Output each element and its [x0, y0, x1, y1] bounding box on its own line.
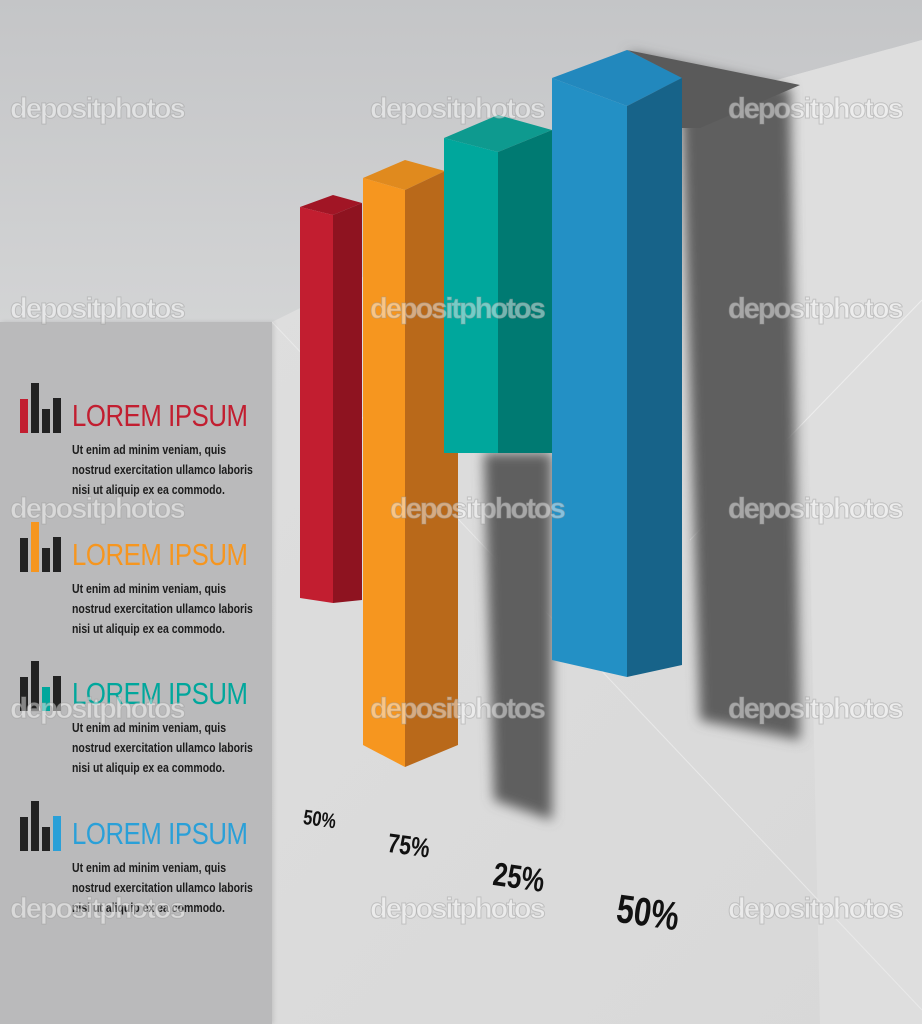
legend item: red	[20, 383, 253, 497]
watermarks: depositphotos	[728, 693, 902, 725]
legend item: teal	[20, 661, 253, 775]
bar: orange	[363, 160, 458, 767]
watermarks: depositphotos	[370, 693, 544, 725]
left panel	[0, 322, 272, 1024]
legend item: orange: Ut enim ad minim veniam, quis	[72, 582, 226, 596]
legend item: red: LOREM IPSUM	[72, 398, 248, 433]
legend item: teal: nostrud exercitation ullamco laboris	[72, 741, 253, 755]
legend item: orange: LOREM IPSUM	[72, 537, 248, 572]
watermarks: depositphotos	[10, 493, 184, 525]
watermarks: depositphotos	[728, 293, 902, 325]
watermarks: depositphotos	[728, 93, 902, 125]
legend item: orange: nisi ut aliquip ex ea commodo.	[72, 622, 225, 636]
legend item: red: Ut enim ad minim veniam, quis	[72, 443, 226, 457]
text: 25%	[491, 855, 547, 899]
legend item: teal: Ut enim ad minim veniam, quis	[72, 721, 226, 735]
watermarks: depositphotos	[10, 893, 184, 925]
watermarks: depositphotos	[728, 493, 902, 525]
legend item: blue: nostrud exercitation ullamco laboris	[72, 881, 253, 895]
text: 75%	[386, 828, 432, 864]
legend item: blue: LOREM IPSUM	[72, 816, 248, 851]
legend item: blue: Ut enim ad minim veniam, quis	[72, 861, 226, 875]
text: 50%	[614, 887, 682, 939]
watermarks: depositphotos	[370, 293, 544, 325]
legend	[20, 383, 253, 915]
legend item: orange	[20, 522, 253, 636]
legend item: red: nostrud exercitation ullamco laboris	[72, 463, 253, 477]
percentages: 50%	[302, 806, 337, 833]
watermarks: depositphotos	[370, 93, 544, 125]
watermarks: depositphotos	[10, 293, 184, 325]
watermarks: depositphotos	[10, 93, 184, 125]
legend item: orange: nostrud exercitation ullamco laboris	[72, 602, 253, 616]
watermarks: depositphotos	[728, 893, 902, 925]
shadows	[484, 52, 800, 820]
bar: teal	[444, 115, 552, 453]
legend item: teal: LOREM IPSUM	[72, 676, 248, 711]
legend item: teal: nisi ut aliquip ex ea commodo.	[72, 761, 225, 775]
legend item: blue: nisi ut aliquip ex ea commodo.	[72, 901, 225, 915]
watermarks: depositphotos	[10, 693, 184, 725]
bar: red	[300, 195, 362, 603]
bar: blue	[552, 50, 682, 677]
watermarks: depositphotos	[390, 493, 564, 525]
legend item: red: nisi ut aliquip ex ea commodo.	[72, 483, 225, 497]
legend item: blue	[20, 801, 253, 915]
watermarks: depositphotos	[370, 893, 544, 925]
